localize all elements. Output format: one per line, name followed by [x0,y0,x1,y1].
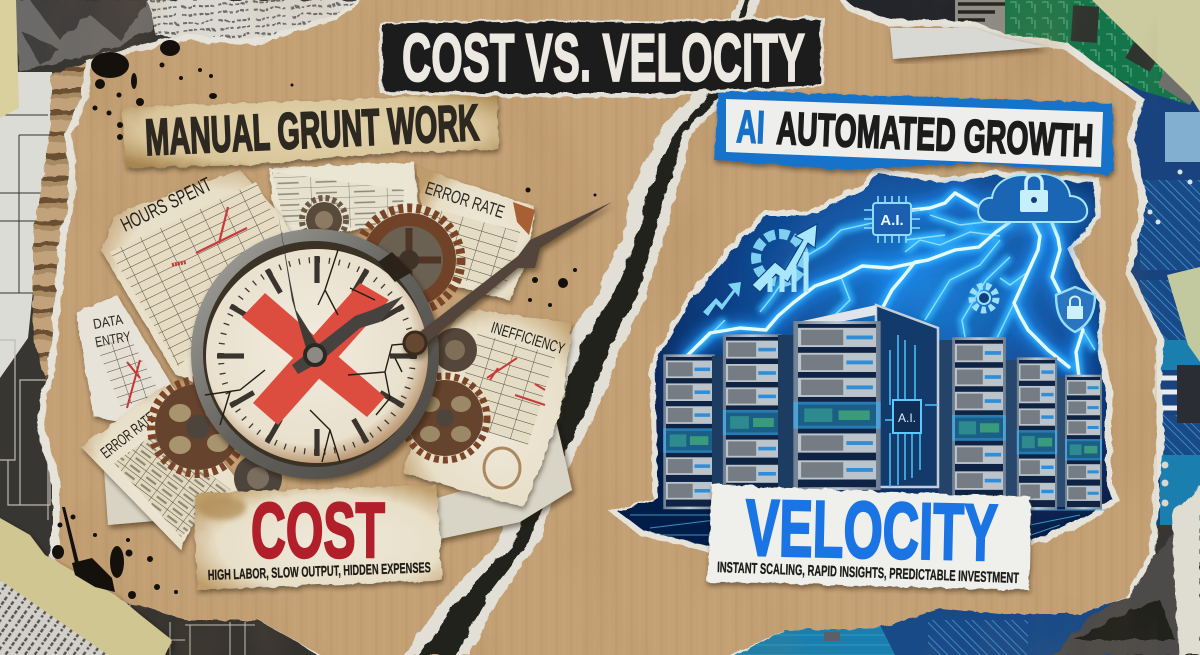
paper: data entry: DATA [92,311,125,332]
paper: error rate upper [417,167,535,300]
blueprint sheet, top left [0,72,55,520]
hour hand [278,213,318,348]
circuit board, right [1120,85,1200,525]
heading text [736,100,1094,167]
title text: COST VS. VELOCITY [402,20,805,96]
paper: error rate lower: ERROR RATE [98,409,159,462]
paper: hours spent [101,170,305,385]
heading text: AI [736,100,766,153]
rack AI chip: A.I. [898,411,916,425]
paper: inefficiency [403,308,572,508]
black torn strip [378,16,825,98]
ink splatters [52,40,596,599]
stray paper behind, lower left [103,430,165,525]
newspaper, top [148,0,372,42]
server rack 5 [1003,357,1057,510]
title banner [378,16,825,98]
stain on paper [198,496,246,520]
top right dark sheet and barcode [840,0,1007,36]
gear: small right [433,328,477,372]
icon: cloud with lock [978,174,1089,228]
server rack 2 [723,334,798,493]
server rack 6 [1053,375,1102,509]
crumpled photo and newspaper, bottom right [1052,485,1200,655]
paper: inefficiency: INEFFICIENCY [489,320,567,358]
beige tape, top right [1092,0,1200,112]
velocity subtitle: INSTANT SCALING, RAPID INSIGHTS, PREDICTABLE INVESTMENT [717,559,1019,587]
cost label [194,485,442,590]
splatter: bottom left [52,507,178,599]
dark blueprint, bottom [90,595,350,655]
floor grid [630,510,1105,537]
icon: shield [1056,287,1095,332]
velocity word: VELOCITY [745,483,998,577]
minor ticks [219,258,415,454]
paper strip [122,90,499,168]
paper: error rate upper: ERROR RATE [423,178,507,222]
paper: centre table [269,162,420,240]
clock ring [197,235,433,473]
velocity label [707,483,1031,590]
stray paper behind, lower right [430,420,572,540]
lightning bolts [686,193,1095,377]
heading strip: manual grunt work [122,90,499,168]
minute hand [292,296,403,374]
splatter: right of clock [526,188,596,307]
ring break [378,252,412,282]
cost word: COST [251,486,385,574]
circuit board, bottom [715,600,1140,655]
splatter: top left [91,40,294,140]
green circuit board, top right [1005,0,1195,105]
white inner strip [726,99,1103,167]
cracks [205,250,415,462]
gear: bottom centre [234,454,282,502]
torn centre split [403,0,760,655]
black gap [419,0,751,655]
gear: upper right [357,208,461,312]
coffee ring [484,448,520,488]
panel: manual grunt work collage [76,162,612,550]
tape [0,518,172,655]
torn scene backdrop [614,170,1117,550]
corrugated cardboard strip [33,60,88,385]
beige tape, top left [0,0,19,118]
heading text: MANUAL GRUNT WORK [144,94,480,166]
gear: upper small [302,198,346,242]
wide lightning glow [686,193,1083,377]
hour marks [217,256,417,456]
paper [194,485,442,590]
gear: lower left [151,380,245,474]
cost subtitle: HIGH LABOR, SLOW OUTPUT, HIDDEN EXPENSES [208,560,431,584]
clock [197,202,612,473]
tape, right [1167,267,1200,362]
paper: data entry [76,295,175,425]
grey paper scrap, top right [890,28,1047,59]
red tape X [242,283,389,425]
paper: data entry: ENTRY [94,328,132,350]
icon: small gear [972,286,996,310]
rack AI chip [893,400,921,433]
paper: hours spent: HOURS SPENT [118,174,215,236]
icon: rising arrow [703,282,741,316]
paper: error rate lower [81,385,245,550]
newspaper under tape [0,580,108,655]
long loose hand [404,202,612,354]
lightning glow [686,193,1095,377]
heading strip: AI automated growth [714,90,1114,175]
centre hub [305,345,325,365]
panel: AI automated growth scene [614,170,1117,550]
server rack 4 [938,337,1006,500]
clock face [206,249,428,463]
icon: AI chip [864,196,920,243]
central server rack [793,305,938,490]
gear: lower right [403,376,487,460]
crumpled photo fragment, top left [12,0,160,72]
paper [707,485,1031,590]
rack side [876,305,938,487]
paper edge of split [403,0,760,655]
server rack 1 [663,354,725,509]
bottom-left tape and newspaper [0,518,172,655]
blue strip [714,90,1114,175]
icon: AI chip: A.I. [880,212,904,229]
icon: gear with chart [752,224,817,292]
